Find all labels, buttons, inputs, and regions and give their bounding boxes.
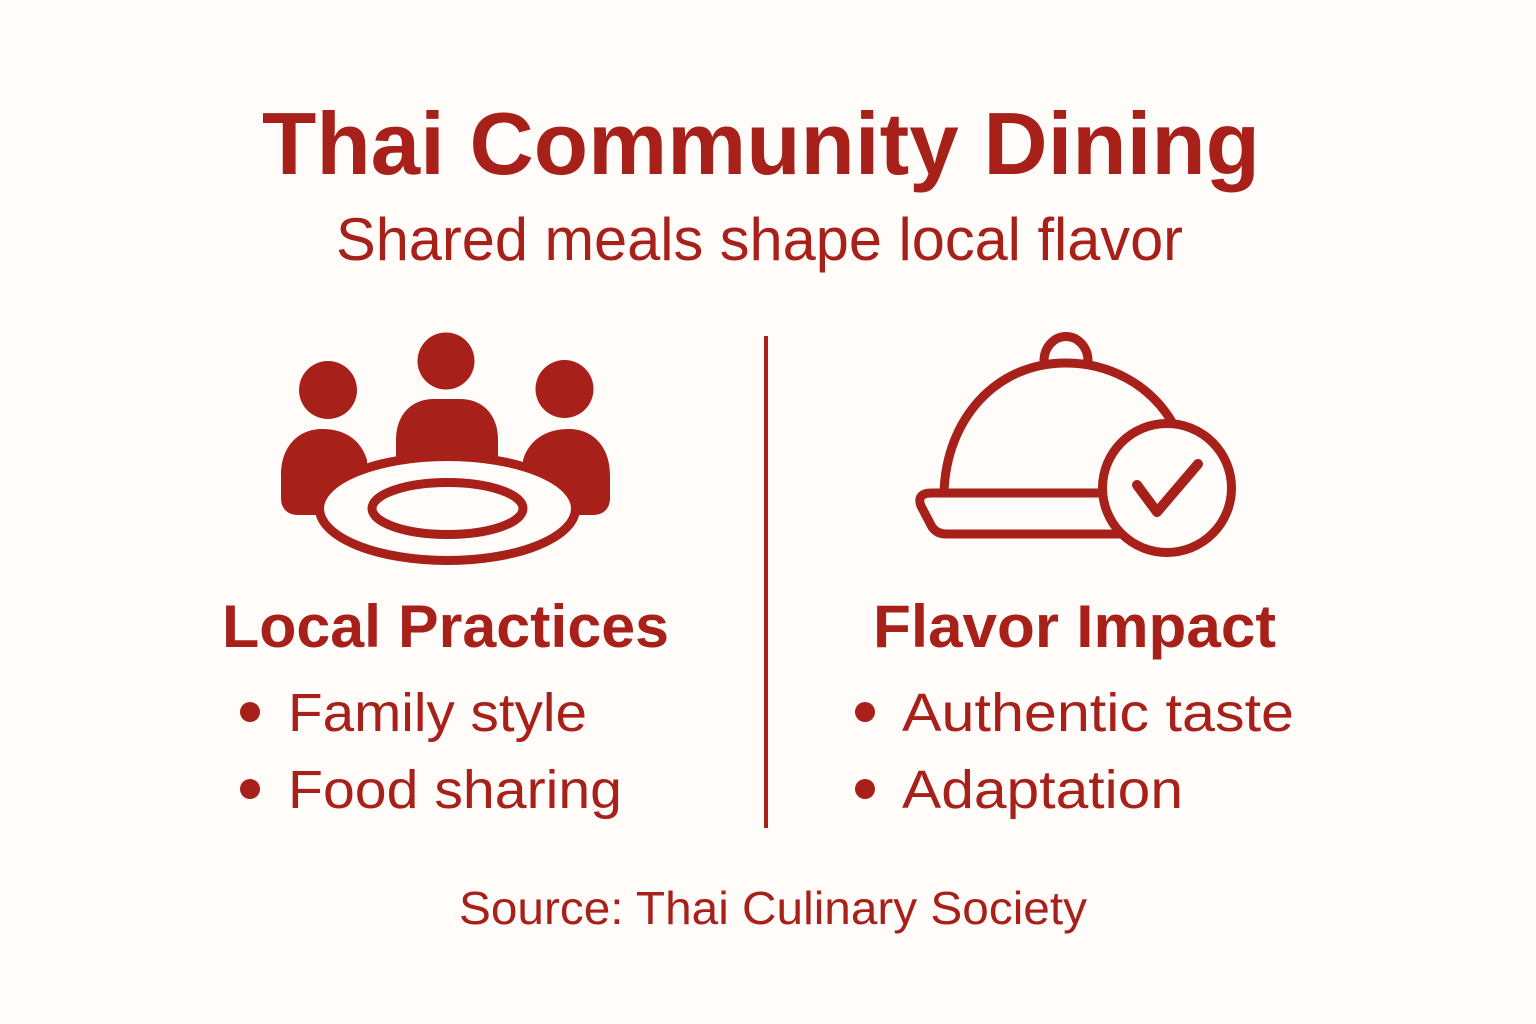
list: flavor impact [855,683,1294,820]
heading: local practices: Local Practices [222,593,669,660]
bullet: family style: Family style [288,683,587,743]
title: Thai Community Dining [262,94,1260,193]
icon: covered dish with check mark [920,336,1232,552]
vertical divider [764,336,768,828]
bullet: authentic taste: Authentic taste [902,683,1294,743]
icon: people around table [281,332,610,560]
subtitle: Shared meals shape local flavor [336,206,1183,273]
heading: flavor impact: Flavor Impact [873,593,1276,660]
list: local practices [240,683,622,820]
source line: Source: Thai Culinary Society [459,882,1087,934]
bullet: adaptation: Adaptation [902,760,1183,820]
bullet: food sharing: Food sharing [288,760,622,820]
